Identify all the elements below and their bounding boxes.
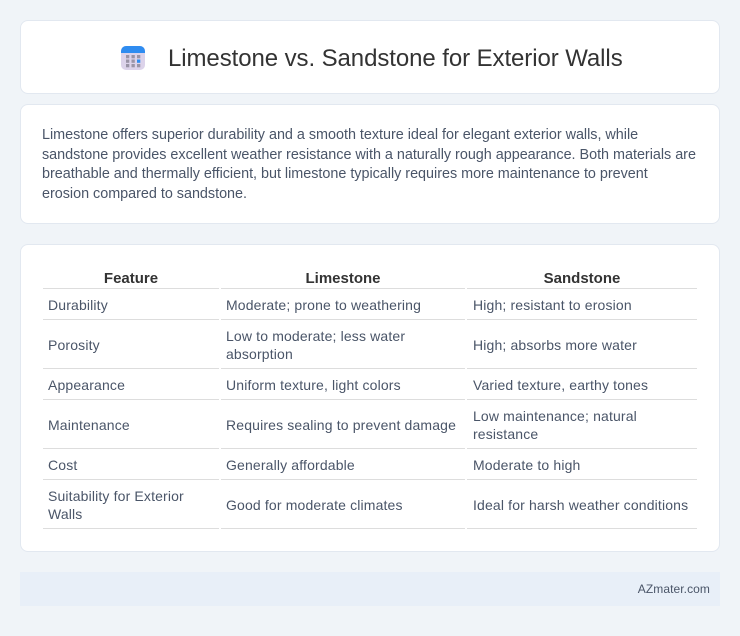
Suitability sandstone: Ideal for harsh weather conditions — [473, 497, 688, 513]
table header: Sandstone: Sandstone — [544, 270, 620, 287]
Appearance sandstone: Varied texture, earthy tones — [473, 377, 648, 393]
footer source: AZmater.com — [638, 582, 710, 596]
panel: comparison table — [20, 244, 720, 552]
table header: Feature: Feature — [104, 270, 158, 287]
summary text — [42, 127, 696, 202]
row: Appearance: Appearance — [48, 377, 125, 393]
Appearance limestone: Uniform texture, light colors — [226, 377, 401, 393]
Maintenance sandstone — [473, 408, 637, 442]
Durability limestone: Moderate; prone to weathering — [226, 297, 421, 313]
Porosity limestone: absorption — [226, 346, 293, 362]
row: Suitability — [48, 488, 184, 522]
Durability sandstone: High; resistant to erosion — [473, 297, 632, 313]
panel: title header — [20, 20, 720, 94]
Suitability limestone: Good for moderate climates — [226, 497, 403, 513]
Cost sandstone: Moderate to high — [473, 457, 580, 473]
row: Cost: Cost — [48, 457, 77, 473]
icon: calendar — [121, 46, 145, 70]
Porosity limestone — [226, 328, 405, 362]
row: Porosity: Porosity — [48, 337, 100, 353]
row: Suitability: Walls — [48, 506, 82, 522]
Cost limestone: Generally affordable — [226, 457, 355, 473]
Maintenance sandstone: resistance — [473, 426, 538, 442]
Maintenance limestone: Requires sealing to prevent damage — [226, 417, 456, 433]
Maintenance sandstone: Low maintenance; natural — [473, 408, 637, 424]
footer bar — [20, 572, 720, 606]
summary text: sandstone provides excellent weather resistance with a naturally rough appearance. Both materials are — [42, 146, 696, 162]
row: Durability: Durability — [48, 297, 108, 313]
Porosity sandstone: High; absorbs more water — [473, 337, 637, 353]
summary text: breathable and thermally efficient, but limestone typically requires more maintenance to prevent — [42, 166, 648, 182]
title: Limestone vs. Sandstone for Exterior Walls — [168, 45, 623, 72]
summary text: erosion compared to sandstone. — [42, 186, 247, 202]
summary text: Limestone offers superior durability and a smooth texture ideal for elegant exterior walls, while — [42, 127, 638, 143]
Porosity limestone: Low to moderate; less water — [226, 328, 405, 344]
table header: Limestone: Limestone — [305, 270, 380, 287]
panel: summary — [20, 104, 720, 224]
row: Suitability: Suitability for Exterior — [48, 488, 184, 504]
row: Maintenance: Maintenance — [48, 417, 130, 433]
